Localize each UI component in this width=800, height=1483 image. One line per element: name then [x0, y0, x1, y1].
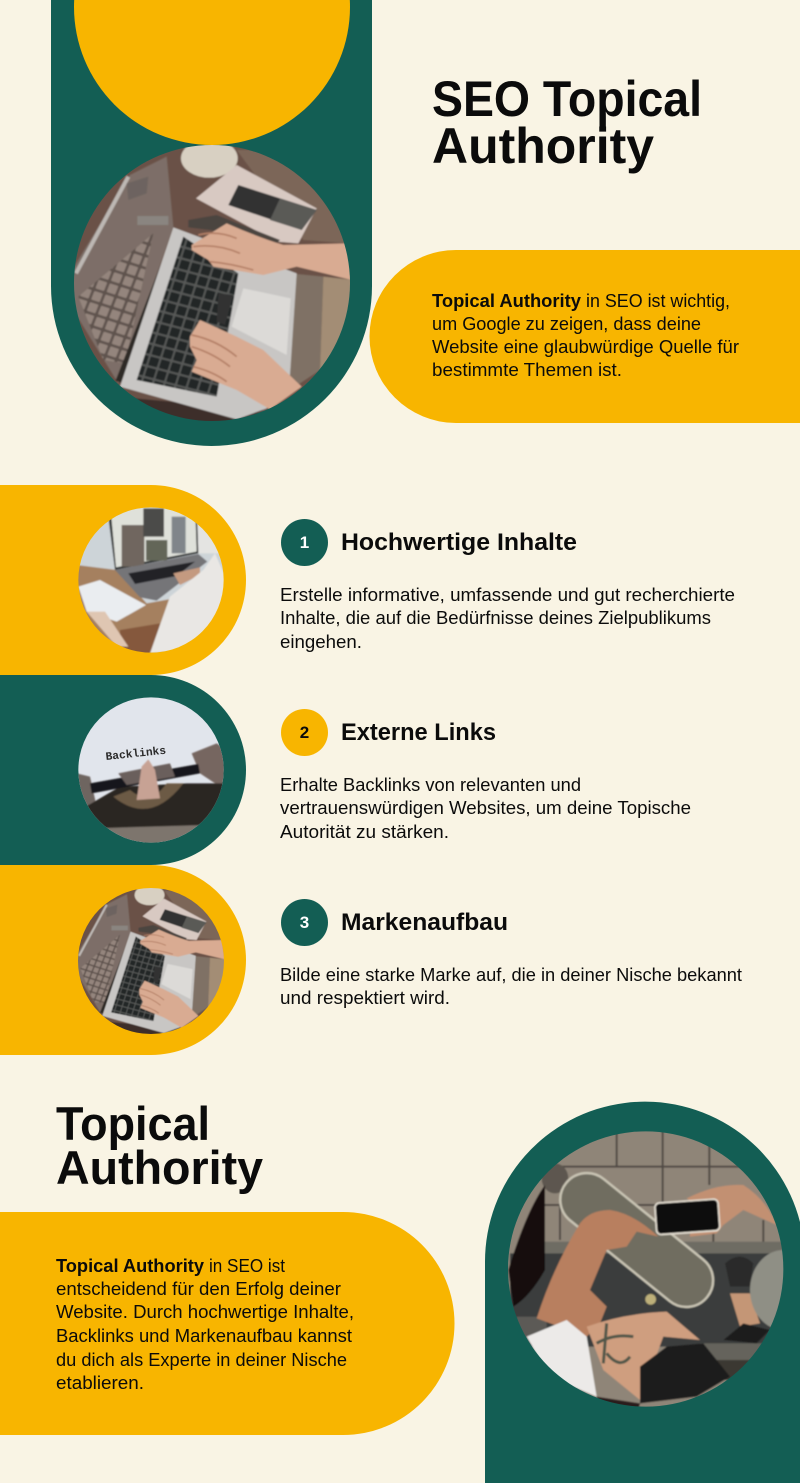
text 1 — [280, 584, 735, 652]
panel: closing green arch with photo — [485, 1102, 800, 1483]
panel: closing callout — [0, 1212, 455, 1435]
panel: hero green arch with photo — [50, 0, 372, 450]
panel: step 3 image band — [0, 865, 246, 1055]
photo: hands typing on laptop — [50, 130, 370, 450]
badge 2: 2 — [300, 723, 309, 742]
closing text: entscheidend für den Erfolg deiner — [56, 1278, 341, 1299]
intro text: bestimmte Themen ist. — [432, 359, 622, 380]
panel: intro callout — [369, 250, 800, 423]
closing title — [56, 1097, 263, 1194]
text 2 — [280, 774, 691, 842]
badge 1 — [281, 519, 328, 566]
step 2 — [280, 709, 691, 842]
title — [432, 71, 702, 174]
photo: hands typing, small — [65, 880, 235, 1049]
intro text — [432, 290, 739, 380]
photo: laptop on desk — [78, 507, 224, 653]
badge 1: 1 — [300, 533, 309, 552]
closing title: Topical — [56, 1097, 210, 1150]
text 1: eingehen. — [280, 631, 362, 652]
intro text: Topical Authority — [432, 290, 582, 311]
step 1 — [280, 519, 735, 652]
closing text: in SEO ist — [209, 1255, 285, 1276]
title: SEO Topical — [432, 71, 702, 127]
closing text — [56, 1255, 354, 1393]
text 3: und respektiert wird. — [280, 987, 450, 1008]
closing text: Topical Authority — [56, 1255, 205, 1276]
heading 3: Markenaufbau — [341, 909, 508, 936]
text 1: Erstelle informative, umfassende und gut recherchierte — [280, 584, 735, 605]
panel: step 2 image band — [0, 675, 250, 865]
panel: step 1 image band — [0, 485, 250, 677]
decorative yellow circle — [74, 0, 350, 145]
closing title: Authority — [56, 1141, 263, 1194]
title: Authority — [432, 118, 654, 174]
text 2: Autorität zu stärken. — [280, 821, 449, 842]
badge 3 — [281, 899, 328, 946]
photo: typewriter with Backlinks: Backlinks — [105, 746, 167, 764]
text 2: Erhalte Backlinks von relevanten und — [280, 774, 581, 795]
step 3 — [280, 899, 742, 1008]
photo: skateboard and phone — [508, 1131, 784, 1407]
closing text: du dich als Experte in deiner Nische — [56, 1349, 347, 1370]
closing text: Website. Durch hochwertige Inhalte, — [56, 1301, 354, 1322]
badge 3: 3 — [300, 913, 309, 932]
heading 1: Hochwertige Inhalte — [341, 529, 577, 556]
text 1: Inhalte, die auf die Bedürfnisse deines Zielpublikums — [280, 607, 711, 628]
heading 2: Externe Links — [341, 719, 496, 746]
intro text: Website eine glaubwürdige Quelle für — [432, 336, 739, 357]
intro text: in SEO ist wichtig, — [586, 290, 730, 311]
closing text: Backlinks und Markenaufbau kannst — [56, 1325, 352, 1346]
text 3 — [280, 964, 742, 1008]
photo: typewriter with Backlinks — [78, 697, 224, 843]
text 3: Bilde eine starke Marke auf, die in deiner Nische bekannt — [280, 964, 742, 985]
closing text: etablieren. — [56, 1372, 144, 1393]
intro text: um Google zu zeigen, dass deine — [432, 313, 701, 334]
text 2: vertrauenswürdigen Websites, um deine Topische — [280, 797, 691, 818]
badge 2 — [281, 709, 328, 756]
